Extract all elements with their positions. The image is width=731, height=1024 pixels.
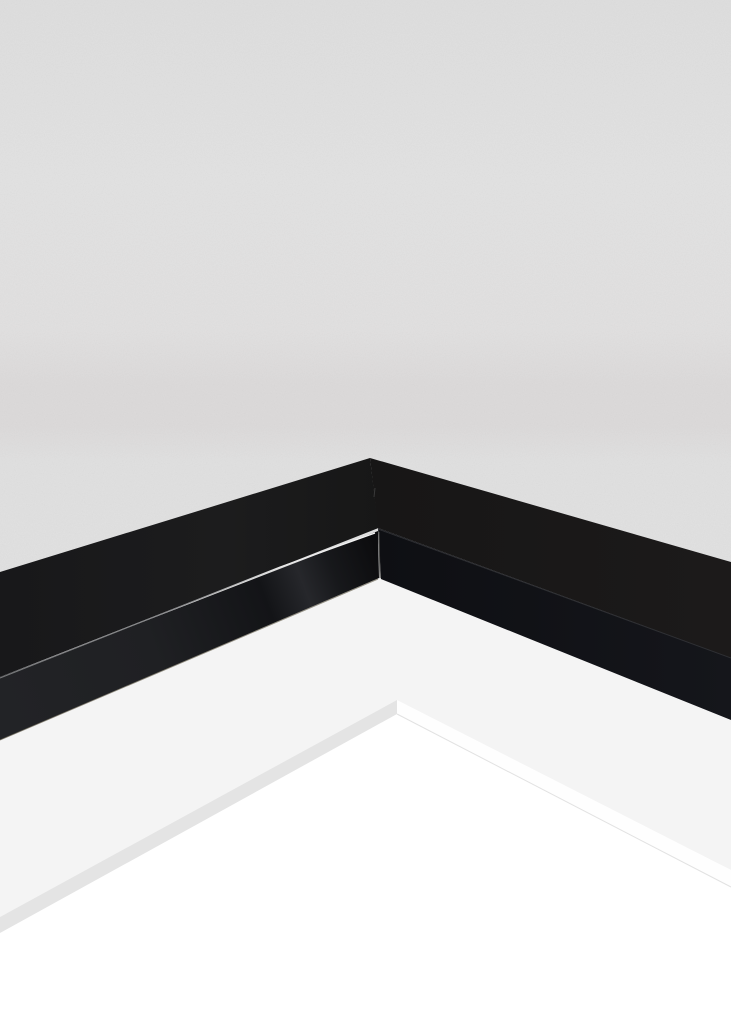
small scratch on frame corner (374, 488, 375, 497)
frame lip highlight: left (0, 533, 375, 678)
frame lip corner seam (379, 532, 380, 578)
passe-partout mat (0, 578, 731, 933)
frame inner lip: right (378, 528, 731, 720)
frame inner lip: left (0, 531, 379, 740)
frame top face: left (0, 458, 378, 677)
mat bevel: right (397, 700, 731, 887)
wall background (0, 0, 731, 600)
bevel shadow line (397, 714, 731, 887)
frame (0, 458, 731, 740)
frame lip bottom edge: left (0, 579, 378, 740)
frame top face: right (370, 458, 731, 658)
mat bevel: left (0, 700, 397, 933)
frame lip edge: right (378, 529, 731, 658)
window opening (0, 714, 731, 1024)
